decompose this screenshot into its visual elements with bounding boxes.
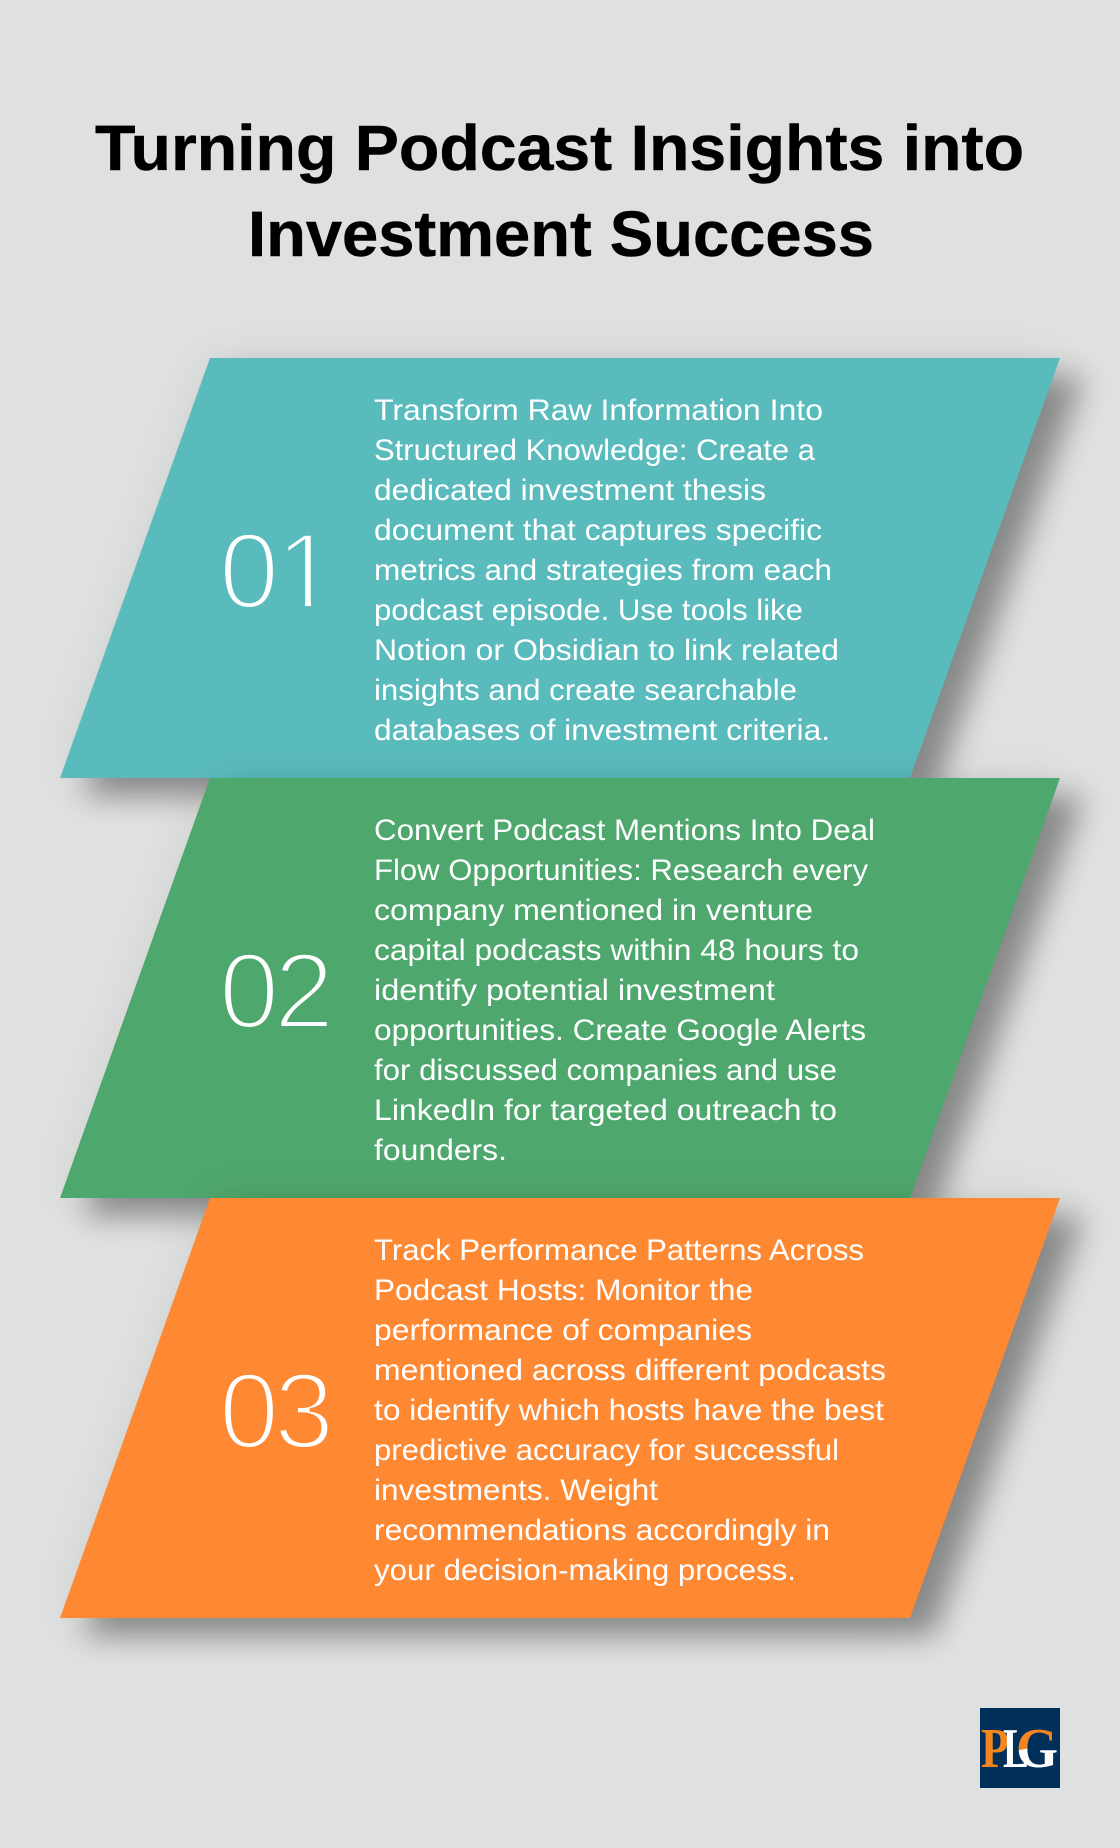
- text: step 2 description: LinkedIn for targeted outreach to: [374, 1094, 837, 1127]
- text: step 2 description: for discussed companies and use: [374, 1054, 837, 1087]
- text: step 3 description: to identify which hosts have the best: [374, 1394, 885, 1427]
- panel: step 2: [60, 778, 1084, 1216]
- text: step 3 description: mentioned across different podcasts: [374, 1354, 886, 1387]
- text: step 1 description: podcast episode. Use tools like: [374, 594, 803, 627]
- text: step 1 description: Notion or Obsidian to link related: [374, 634, 839, 667]
- title: Turning Podcast Insights into: [95, 112, 1024, 184]
- text: step 3 description: Track Performance Patterns Across: [374, 1234, 864, 1267]
- text: step 1 description: Structured Knowledge: Create a: [374, 434, 815, 467]
- text: step 2 description: opportunities. Create Google Alerts: [374, 1014, 866, 1047]
- text: step 2 description: [374, 814, 875, 1167]
- title: [95, 112, 1024, 270]
- text: step 2 description: capital podcasts within 48 hours to: [374, 934, 859, 967]
- text: step 2 description: company mentioned in venture: [374, 894, 813, 927]
- text: step 2 description: identify potential investment: [374, 974, 776, 1007]
- logo: PLG: G: [1016, 1718, 1058, 1780]
- text: step 2 description: Convert Podcast Mentions Into Deal: [374, 814, 875, 847]
- text: step 1 description: document that captures specific: [374, 514, 822, 547]
- text: step 2 description: Flow Opportunities: Research every: [374, 854, 868, 887]
- text: step 1 description: insights and create searchable: [374, 674, 797, 707]
- text: step 3 description: recommendations accordingly in: [374, 1514, 830, 1547]
- text: step 2 description: founders.: [374, 1134, 507, 1167]
- title: Investment Success: [248, 198, 874, 270]
- number 03: 03: [219, 1350, 334, 1471]
- text: step 1 description: dedicated investment thesis: [374, 474, 766, 507]
- number 02: 02: [219, 930, 334, 1051]
- panel: step 1: [60, 358, 1084, 796]
- text: step 1 description: metrics and strategies from each: [374, 554, 832, 587]
- text: step 3 description: your decision-making process.: [374, 1554, 796, 1587]
- text: step 3 description: Podcast Hosts: Monitor the: [374, 1274, 753, 1307]
- text: step 1 description: [374, 394, 839, 747]
- text: step 3 description: predictive accuracy for successful: [374, 1434, 839, 1467]
- logo: PLG: [980, 1708, 1060, 1788]
- text: step 3 description: [374, 1234, 886, 1587]
- logo: PLG: L: [1003, 1718, 1029, 1780]
- text: step 3 description: investments. Weight: [374, 1474, 659, 1507]
- number 01: 01: [219, 510, 336, 631]
- text: step 1 description: Transform Raw Information Into: [374, 394, 823, 427]
- panel: step 3: [60, 1198, 1084, 1636]
- logo: PLG: P: [981, 1718, 1009, 1780]
- text: step 1 description: databases of investment criteria.: [374, 714, 830, 747]
- text: step 3 description: performance of companies: [374, 1314, 752, 1347]
